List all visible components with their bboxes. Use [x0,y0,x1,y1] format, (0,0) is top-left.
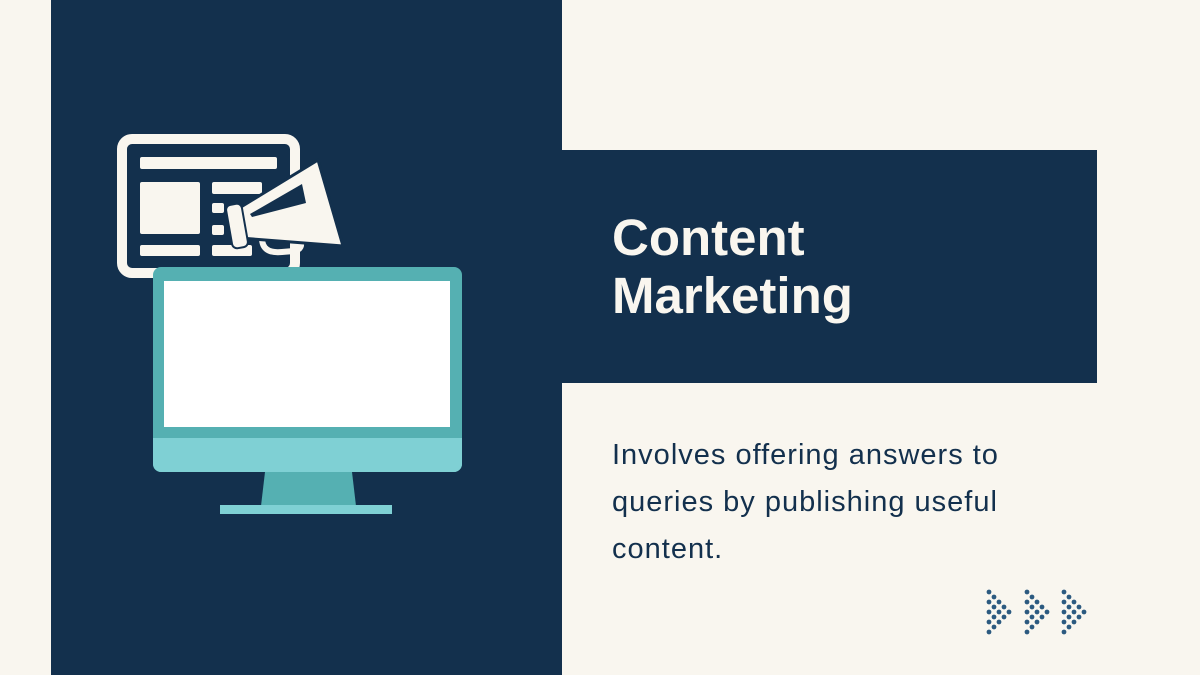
text block: description [612,439,999,565]
icon: content marketing monitor with megaphone [117,134,462,514]
text block: description: content. [612,533,723,565]
icon: document [122,139,295,273]
icon: megaphone [225,160,343,252]
text block: description: Involves offering answers to [612,439,999,471]
panel: title banner [562,150,1097,383]
icon: monitor [153,267,462,514]
title [612,209,853,324]
icon: dotted arrows [986,590,1086,634]
text block: description: queries by publishing useful [612,486,998,518]
title: Marketing [612,267,853,324]
panel: left dark [51,0,562,675]
title: Content [612,209,805,266]
